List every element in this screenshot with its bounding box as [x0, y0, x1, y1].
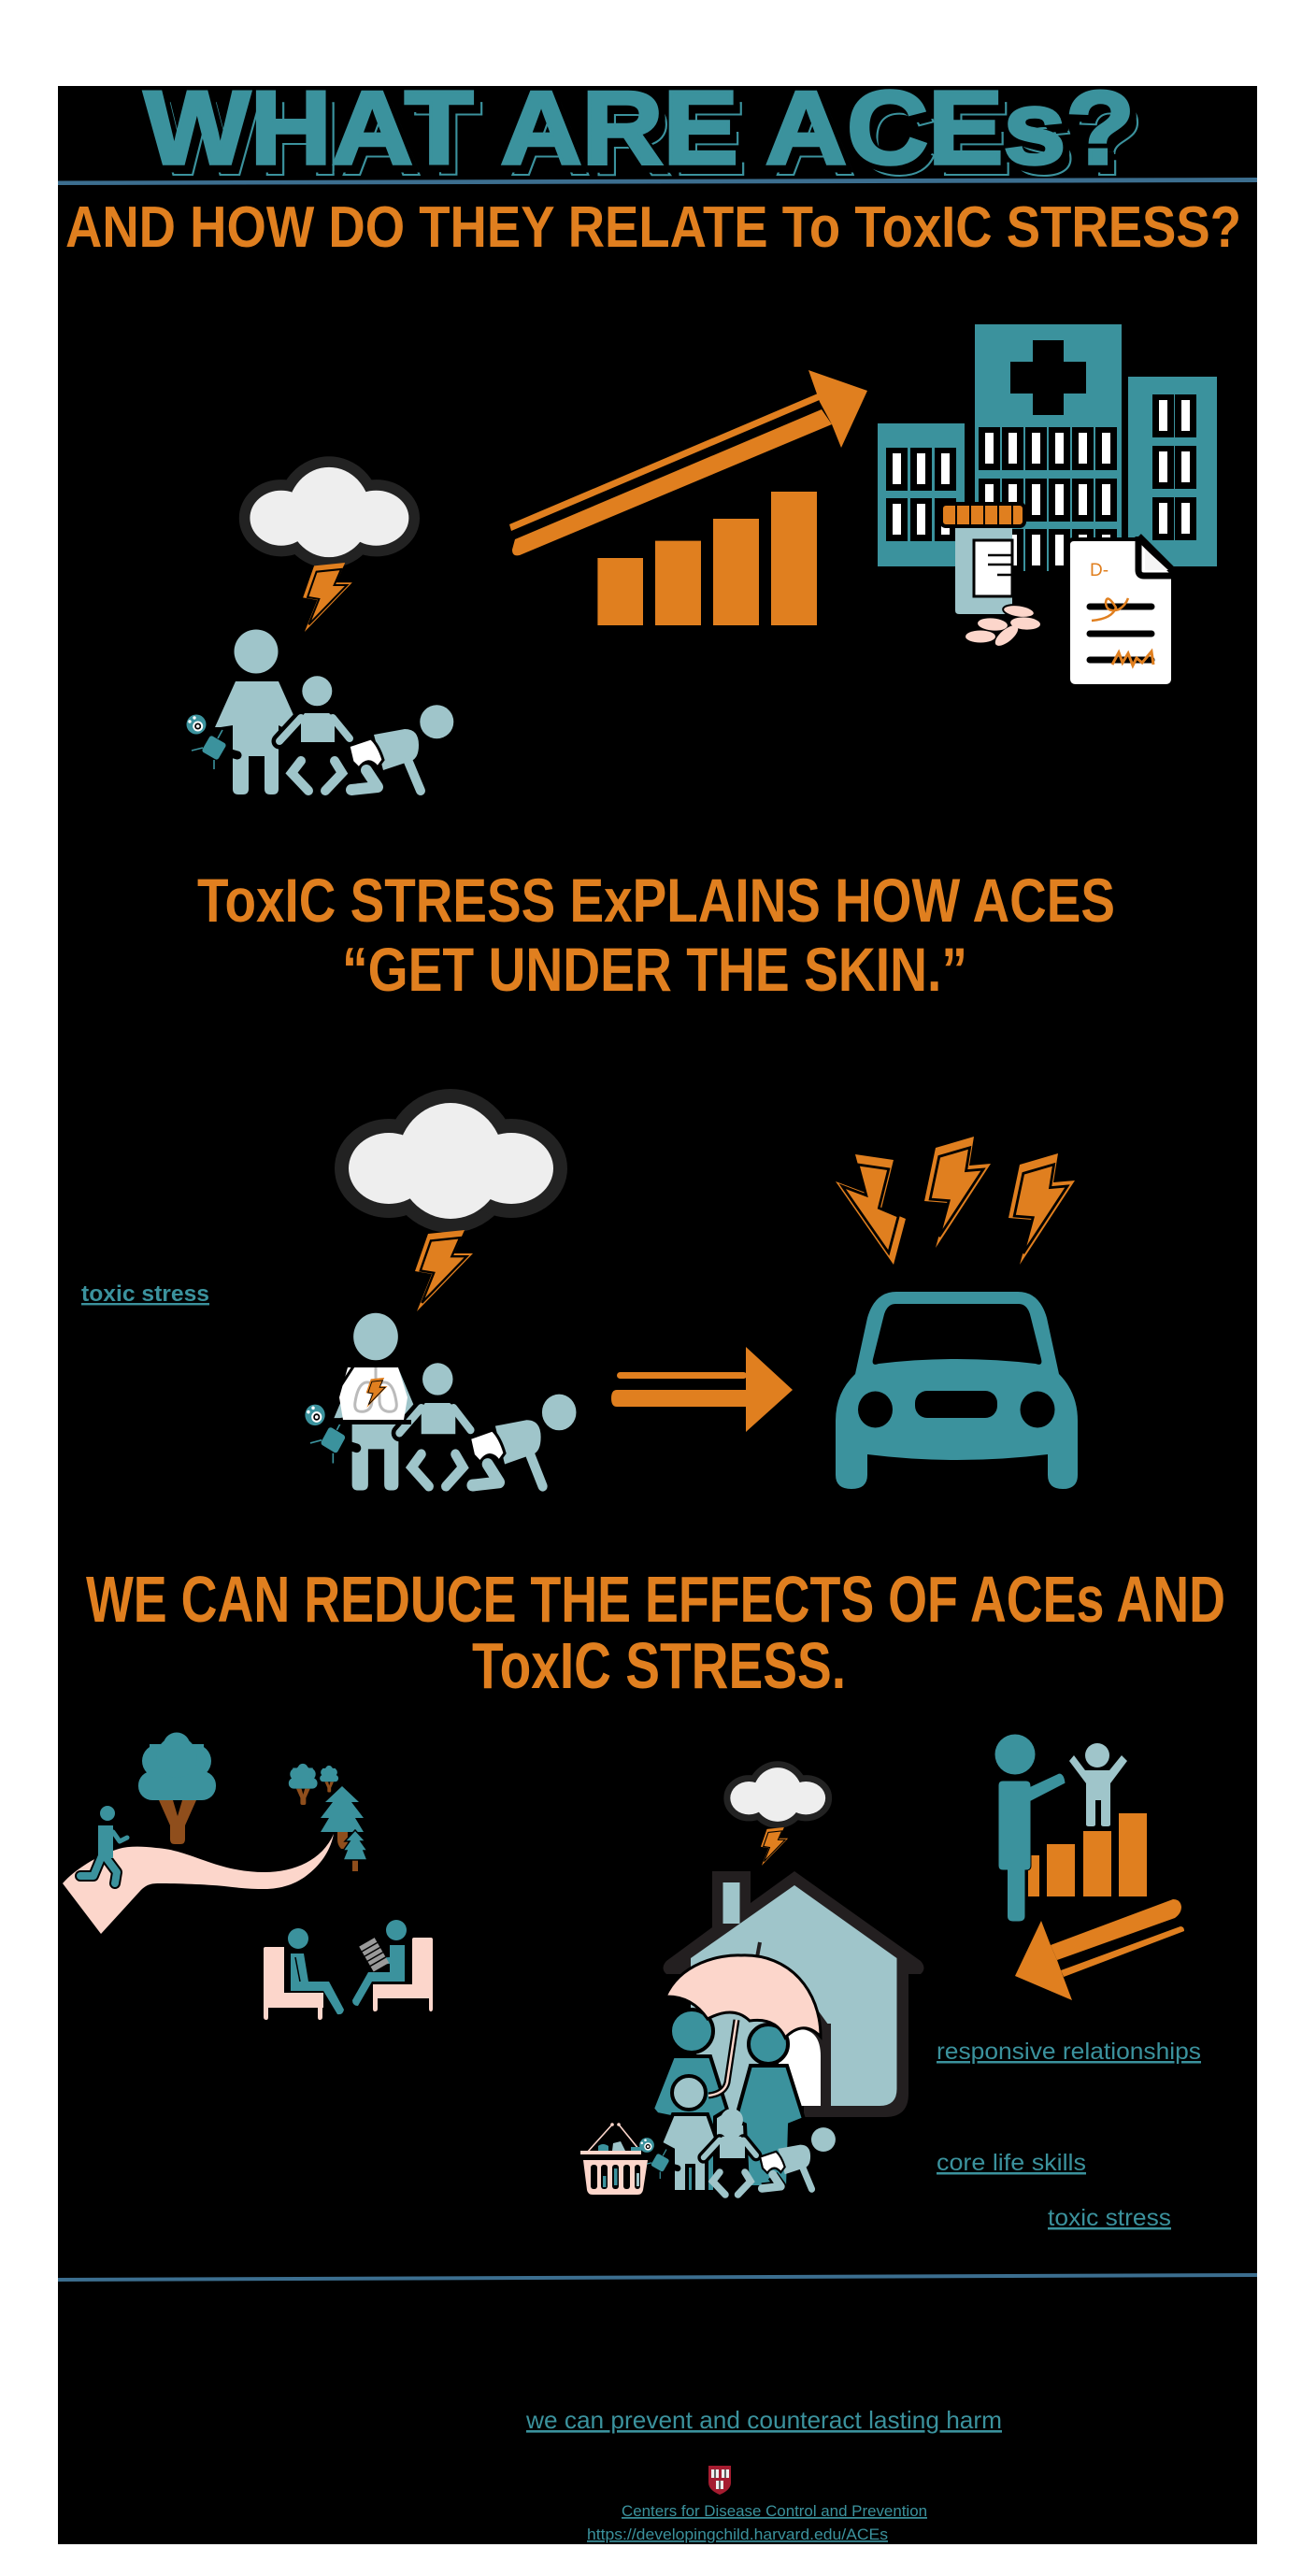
icon: pill bottle [941, 504, 1040, 650]
link: toxic stress 2: toxic stress [1048, 2205, 1171, 2231]
heading: toxic stress: ToxIC STRESS. [472, 1629, 846, 1702]
title: WHAT ARE ACEs? [153, 81, 1144, 197]
icon: Harvard shield [708, 2466, 731, 2495]
icon: report card [1070, 537, 1174, 684]
basket [580, 2123, 648, 2195]
older child [661, 2076, 716, 2192]
link: CDC: Centers for Disease Control and Prevention [622, 2502, 927, 2520]
umbrella [665, 1955, 821, 2038]
doll [639, 2138, 678, 2179]
icon: mentor lifting child on bars [994, 1735, 1147, 1922]
heading: get under the skin: “GET UNDER THE SKIN.” [342, 935, 967, 1004]
link: core life skills: core life skills [937, 2150, 1086, 2176]
title: WHAT ARE ACEs? [144, 70, 1135, 186]
icon: house with sheltered family [580, 1871, 923, 2195]
icon: small trees [289, 1764, 367, 1871]
icon: large tree [138, 1733, 216, 1844]
icon: family with stressed parent [305, 1313, 576, 1490]
icon: rising arrow [509, 370, 867, 555]
link: we can prevent: we can prevent and counteract lasting harm [525, 2406, 1002, 2434]
icon: therapy session [264, 1920, 433, 2020]
icon: storm cloud 2 [349, 1103, 553, 1219]
icon: hospital [878, 324, 1217, 572]
icon: family with stress [187, 630, 453, 794]
icon: report card: D- [1090, 561, 1109, 580]
icon: lightning 2 [415, 1230, 473, 1311]
arrow: double right [611, 1347, 793, 1432]
icon: lightning 1 [303, 563, 352, 632]
icon: three lightning bolts [836, 1137, 1075, 1265]
arrow: down-left [1015, 1899, 1184, 2000]
bar chart: rising [597, 492, 817, 625]
link: toxic stress: toxic stress [81, 1281, 209, 1307]
baby [760, 2127, 836, 2189]
icon: storm cloud 1 [250, 467, 408, 557]
toddler [704, 2109, 756, 2195]
icon: small storm cloud [730, 1767, 825, 1822]
title: WHAT ARE ACEs? [149, 76, 1139, 192]
link: responsive relationships: responsive relationships [937, 2039, 1201, 2065]
parents [652, 2010, 804, 2192]
icon: walking person [80, 1806, 127, 1883]
icon: small lightning [761, 1827, 788, 1866]
link: website: https://developingchild.harvard.edu/ACEs [587, 2526, 888, 2543]
heading: toxic stress explains: ToxIC STRESS ExPLAINS HOW ACES [197, 866, 1115, 935]
icon: car [836, 1292, 1078, 1489]
icon: winding path [63, 1834, 334, 1934]
